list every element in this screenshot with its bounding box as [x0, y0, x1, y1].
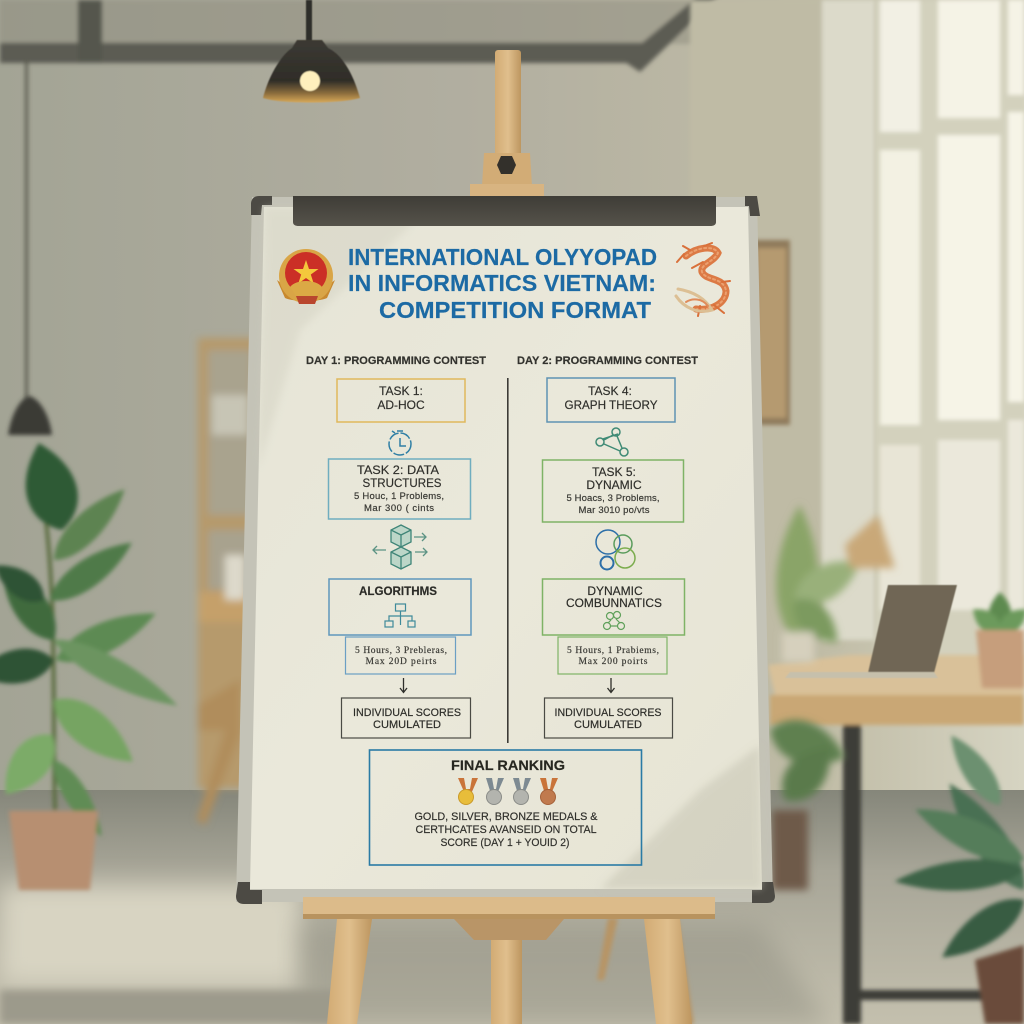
easel top post and clamp: [470, 50, 544, 196]
frame corner: bottom left: [236, 882, 262, 904]
background: laptop: [785, 585, 957, 678]
box: day 1 duration: Max 20D peirts: [366, 657, 437, 667]
icon: bronze medal: [540, 778, 558, 804]
icon: linked nodes: [604, 612, 624, 630]
box: task 4: [547, 378, 675, 422]
text: medal description: CERTHCATES AVANSEID ON TOTAL: [416, 824, 596, 836]
box: algorithms: [329, 579, 471, 635]
background: room wall: [0, 0, 1024, 800]
background: wooden shelf: [197, 338, 258, 825]
box: task 5: [542, 460, 684, 522]
box: task 5: DYNAMIC: [586, 478, 642, 492]
box: task 5: TASK 5:: [592, 465, 636, 479]
background: floor: [0, 790, 1024, 1024]
box: day 1 duration: [346, 637, 456, 674]
heading: day 1: DAY 1: PROGRAMMING CONTEST: [306, 355, 486, 367]
box: day 1 scores: CUMULATED: [373, 719, 441, 731]
text: medal description: [414, 811, 598, 849]
background: right desk: [768, 655, 1024, 1024]
dark clamp bar: [293, 196, 716, 226]
background: picture frame on wall: [752, 240, 790, 425]
box: task 2: TASK 2: DATA: [357, 463, 439, 477]
frame corner: top right: [745, 196, 760, 216]
box: task 2: 5 Houc, 1 Problems,: [354, 491, 444, 502]
box: task 2: [328, 459, 470, 519]
box: day 2 scores: [544, 698, 672, 738]
box: dynamic combinatorics: COMBUNNATICS: [566, 596, 662, 610]
box: day 2 scores: INDIVIDUAL SCORES: [554, 707, 662, 719]
easel rear legs: [597, 918, 694, 1024]
paper shade and sunlight: [258, 207, 762, 889]
background: plant behind desk: [763, 504, 895, 890]
flip board frame: [236, 197, 773, 902]
icon: silver medal 2: [513, 778, 531, 804]
text: medal description: SCORE (DAY 1 + YOUID 2): [440, 837, 570, 849]
box: day 2 duration: [558, 637, 667, 674]
icon: stopwatch: [389, 431, 411, 455]
frame corner: bottom right: [752, 882, 775, 903]
background: small pot on desk: [967, 592, 1024, 688]
icon: silver medal: [486, 778, 504, 804]
arrow: day 1: [400, 678, 407, 692]
frame corner: top left: [251, 196, 272, 215]
easel front legs: [327, 919, 692, 1024]
left plant pot: [9, 811, 98, 890]
background: foreground plant: [893, 728, 1024, 1024]
box: day 2 duration: Max 200 poirts: [578, 657, 648, 667]
box: task 1: TASK 1:: [379, 384, 423, 398]
box: task 2: STRUCTURES: [362, 476, 442, 490]
box: day 1 scores: [342, 698, 470, 738]
box: task 5: 5 Hoacs, 3 Problems,: [566, 493, 660, 504]
background: bright window: [875, 0, 1024, 660]
box: day 2 duration: 5 Hours, 1 Prabiems,: [567, 646, 659, 656]
icon: hierarchy: [385, 604, 415, 627]
easel bottom ledge: [303, 897, 715, 919]
box: day 1 duration: 5 Hours, 3 Prebleras,: [355, 646, 447, 656]
box: day 1 scores: INDIVIDUAL SCORES: [353, 707, 461, 719]
background: ceiling lamp: [263, 0, 360, 102]
text: medal description: GOLD, SILVER, BRONZE MEDALS &: [414, 811, 598, 823]
background: right wall section: [690, 0, 875, 660]
background: left potted plant: [0, 437, 184, 890]
box: day 2 scores: CUMULATED: [574, 719, 642, 731]
box: task 1: AD-HOC: [377, 398, 425, 412]
box: dynamic combinatorics: DYNAMIC: [587, 584, 643, 598]
box: task 4: GRAPH THEORY: [564, 398, 658, 412]
title: COMPETITION FORMAT: [379, 297, 651, 323]
heading: final ranking: FINAL RANKING: [451, 757, 565, 773]
icon: gold medal: [458, 778, 478, 804]
centre divider: [507, 378, 509, 743]
box: dynamic combinatorics: [542, 579, 684, 635]
icon: dragon and lotus: [676, 243, 730, 316]
background: pendant lamp left: [8, 396, 52, 435]
box: task 4: TASK 4:: [588, 384, 632, 398]
heading: day 2: DAY 2: PROGRAMMING CONTEST: [517, 355, 698, 367]
box: task 2: Mar 300 ( cints: [364, 503, 434, 514]
icon: data cubes with arrows: [373, 525, 427, 569]
panel: final ranking: [370, 750, 642, 865]
title: IN INFORMATICS VIETNAM:: [348, 270, 656, 296]
emblem: Vietnam national emblem: [277, 249, 335, 304]
paper sheet: [250, 207, 762, 889]
title: [348, 244, 657, 323]
background: ceiling pipes: [0, 0, 720, 400]
box: task 1: [337, 379, 465, 422]
arrow: day 2: [608, 678, 614, 692]
icon: overlapping circles: [596, 530, 635, 570]
box: task 5: Mar 3010 po/vts: [578, 505, 650, 516]
icon: graph nodes: [596, 428, 628, 456]
title: INTERNATIONAL OLYYOPAD: [348, 244, 657, 270]
box: algorithms: ALGORITHMS: [359, 584, 437, 598]
